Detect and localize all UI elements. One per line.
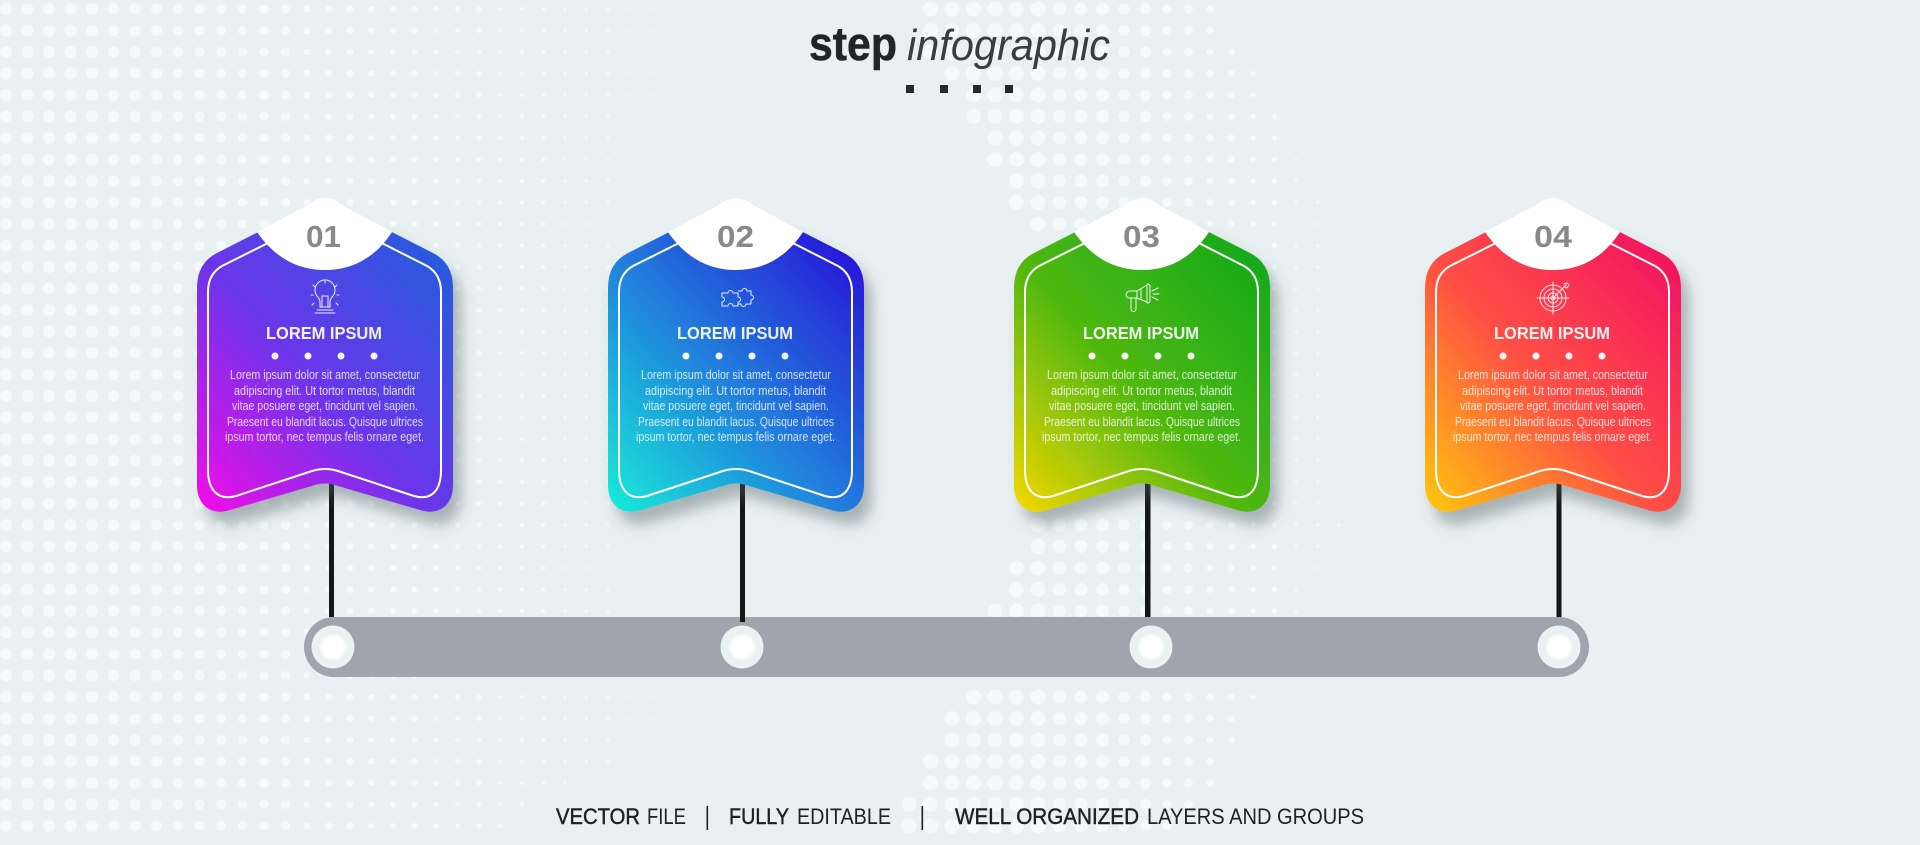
card shape — [608, 226, 864, 512]
number cap — [668, 198, 803, 270]
panel: step 04 — [1425, 198, 1681, 512]
body text — [636, 367, 835, 444]
dots — [272, 352, 378, 360]
icon: puzzle pieces — [722, 288, 754, 306]
footer tagline: VECTOR — [556, 804, 640, 829]
timeline node 2 — [720, 626, 764, 668]
number: 02 — [717, 219, 754, 254]
title: step — [809, 17, 897, 70]
body text: ipsum tortor, nec tempus felis ornare eget. — [1042, 429, 1241, 444]
timeline node 1 — [312, 626, 354, 668]
body text: vitae posuere eget, tincidunt vel sapien. — [1460, 398, 1646, 413]
body text — [225, 367, 424, 444]
dots — [1500, 352, 1606, 360]
body text: Lorem ipsum dolor sit amet, consectetur — [641, 367, 832, 382]
footer tagline: EDITABLE — [797, 804, 891, 829]
title square dots — [906, 85, 1013, 93]
body text: Praesent eu blandit lacus. Quisque ultrices — [1455, 414, 1651, 429]
footer tagline — [556, 804, 1364, 830]
number cap — [1485, 198, 1620, 270]
footer tagline: FULLY — [729, 804, 789, 829]
body text: ipsum tortor, nec tempus felis ornare eget. — [225, 429, 424, 444]
body text: vitae posuere eget, tincidunt vel sapien. — [643, 398, 829, 413]
body text: ipsum tortor, nec tempus felis ornare eget. — [636, 429, 835, 444]
timeline node 4 — [1538, 626, 1580, 668]
heading: LOREM IPSUM — [1494, 323, 1610, 343]
body text: vitae posuere eget, tincidunt vel sapien. — [232, 398, 418, 413]
footer tagline: WELL ORGANIZED — [955, 804, 1139, 829]
dots — [1088, 352, 1194, 360]
body text — [1042, 367, 1241, 444]
inner outline — [619, 238, 852, 497]
panel: step 01 — [197, 198, 453, 512]
timeline bar — [304, 617, 1589, 677]
body text: vitae posuere eget, tincidunt vel sapien. — [1049, 398, 1235, 413]
body text: ipsum tortor, nec tempus felis ornare eget. — [1453, 429, 1652, 444]
icon: target — [1537, 282, 1569, 314]
body text: Lorem ipsum dolor sit amet, consectetur — [1458, 367, 1649, 382]
title — [809, 17, 1110, 70]
inner outline — [1025, 238, 1258, 497]
body text — [1453, 367, 1652, 444]
footer tagline: FILE — [647, 804, 686, 829]
heading: LOREM IPSUM — [677, 323, 793, 343]
number: 03 — [1123, 219, 1160, 254]
title: infographic — [907, 21, 1110, 70]
number: 01 — [306, 219, 341, 254]
body text: adipiscing elit. Ut tortor metus, blandit — [234, 383, 415, 398]
heading: LOREM IPSUM — [1083, 323, 1199, 343]
inner outline — [208, 238, 441, 497]
body text: adipiscing elit. Ut tortor metus, blandit — [1462, 383, 1643, 398]
panel: step 03 — [1014, 198, 1270, 512]
heading: LOREM IPSUM — [266, 323, 382, 343]
body text: adipiscing elit. Ut tortor metus, blandit — [1051, 383, 1232, 398]
icon: light bulb — [311, 280, 339, 313]
background with halftone dots — [0, 2, 1340, 833]
number cap — [1074, 198, 1209, 270]
card shape — [1014, 226, 1270, 512]
icon: megaphone — [1126, 284, 1159, 312]
card shape — [1425, 226, 1681, 512]
panel: step 02 — [608, 198, 864, 512]
number: 04 — [1534, 219, 1573, 254]
body text: Praesent eu blandit lacus. Quisque ultrices — [227, 414, 423, 429]
number cap — [257, 198, 392, 270]
body text: Praesent eu blandit lacus. Quisque ultrices — [638, 414, 834, 429]
dots — [682, 352, 788, 360]
footer tagline: LAYERS AND GROUPS — [1147, 804, 1364, 829]
connector stems — [329, 480, 1562, 622]
body text: adipiscing elit. Ut tortor metus, blandit — [645, 383, 826, 398]
inner outline — [1436, 238, 1669, 497]
body text: Praesent eu blandit lacus. Quisque ultrices — [1044, 414, 1240, 429]
body text: Lorem ipsum dolor sit amet, consectetur — [230, 367, 421, 382]
timeline node 3 — [1130, 626, 1172, 668]
card shape — [197, 226, 453, 512]
body text: Lorem ipsum dolor sit amet, consectetur — [1047, 367, 1238, 382]
